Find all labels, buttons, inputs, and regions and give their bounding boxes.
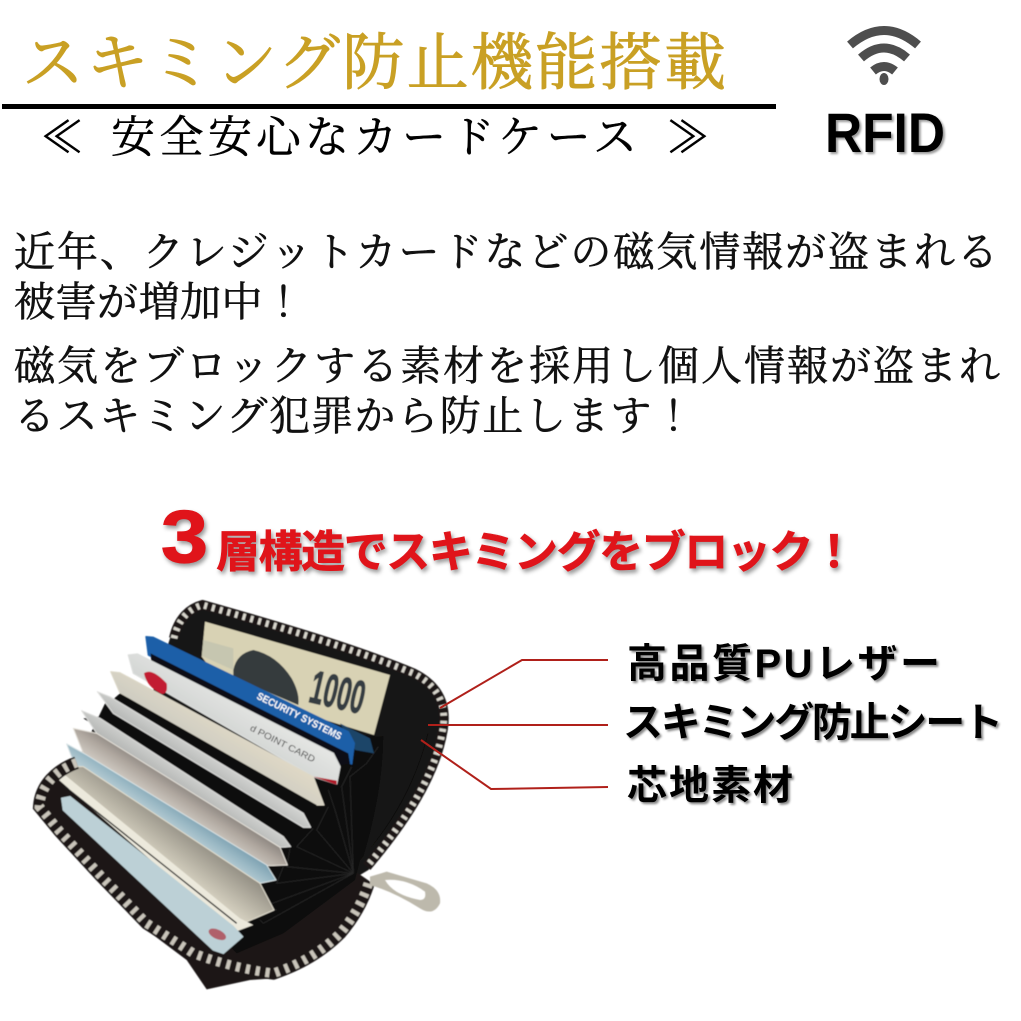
description text [14, 229, 1000, 439]
red heading: 3 [161, 495, 208, 578]
upper zipper [174, 605, 444, 867]
title underline [2, 104, 776, 109]
subtitle: ≪ [40, 113, 84, 162]
pocket pleat lines [260, 747, 378, 923]
silver card 2 [82, 711, 291, 847]
red heading [161, 495, 856, 578]
wallet lower shell [34, 758, 373, 989]
zipper pull [370, 872, 440, 912]
side lining [363, 730, 428, 857]
blue security card: SECURITY SYSTEMS [255, 691, 343, 743]
lower zipper [39, 763, 368, 973]
silver card 1 [97, 692, 311, 827]
grey card 3 [73, 728, 287, 866]
blue tinted card 4 [67, 744, 276, 885]
callout labels: スキミング防止シート [623, 701, 1003, 745]
wallet back shell [153, 601, 449, 923]
black pocket edge [107, 693, 317, 825]
pale blue front card [62, 797, 243, 953]
callout labels: 芯地素材 [627, 764, 793, 808]
callout leader lines [421, 660, 608, 789]
subtitle: ≫ [666, 113, 710, 162]
subtitle: 安全安心なカードケース [111, 113, 637, 162]
icon: wifi signal [850, 30, 918, 85]
wallet photo illustration [34, 601, 449, 989]
description text: るスキミング犯罪から防止します！ [14, 393, 694, 439]
description text: 被害が増加中！ [14, 279, 304, 325]
banknote: 1000 [305, 661, 370, 724]
cream card [111, 672, 324, 805]
callout labels [623, 642, 1003, 808]
title: スキミング防止機能搭載 [22, 30, 726, 98]
thin black card line [65, 787, 237, 923]
black pocket 2 [83, 715, 303, 848]
callout labels: 高品質PUレザー [627, 642, 940, 686]
point card: d POINT CARD [248, 723, 317, 765]
RFID label: RFID [825, 101, 945, 164]
red heading: 層構造でスキミングをブロック！ [216, 528, 856, 577]
white card edge [56, 775, 253, 933]
beige card 5 [62, 767, 274, 923]
description text: 磁気をブロックする素材を採用し個人情報が盗まれ [14, 343, 1000, 389]
dark blue card [340, 723, 374, 753]
black pleated pockets [70, 700, 428, 953]
description text: 近年、クレジットカードなどの磁気情報が盗まれる [14, 229, 998, 275]
point card [128, 654, 340, 785]
banknote [202, 622, 390, 735]
blue security card [146, 637, 354, 765]
